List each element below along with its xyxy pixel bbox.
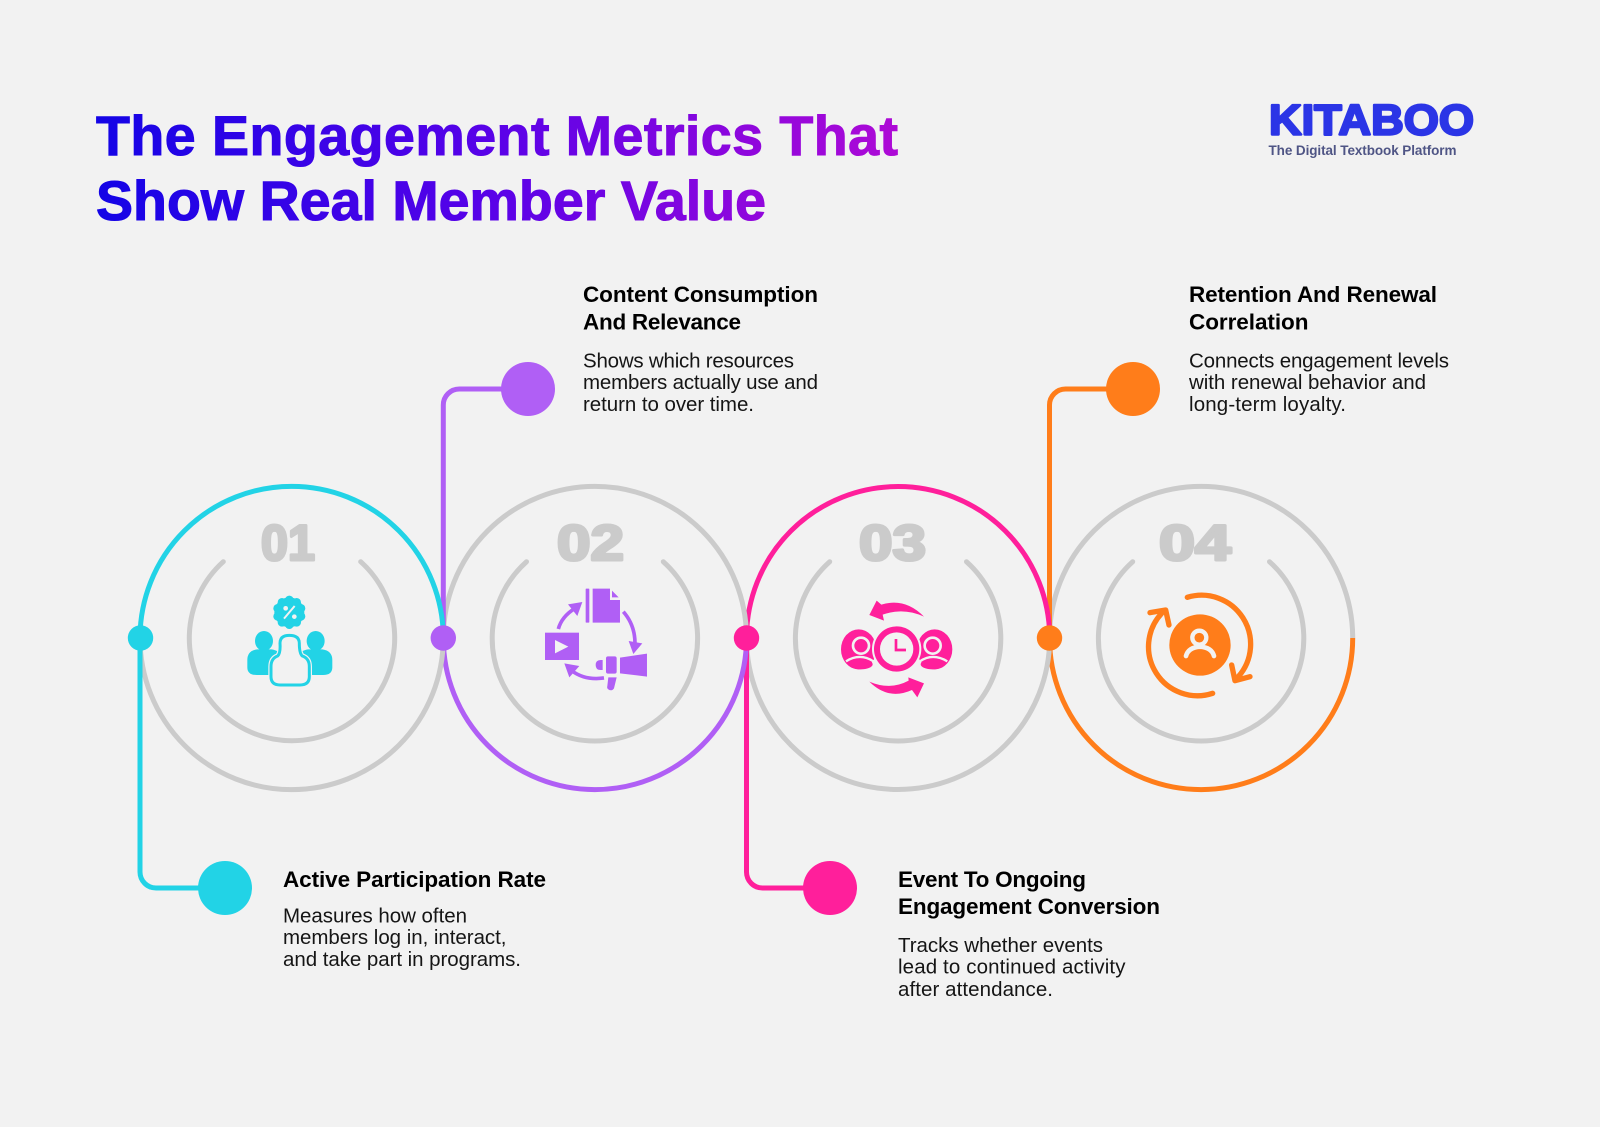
connector: step 01 bbox=[140, 638, 225, 888]
number 03: 03 bbox=[859, 515, 926, 571]
panel: step 04 retention and renewal bbox=[1050, 282, 1449, 790]
connector: step 02 bbox=[443, 389, 528, 638]
text: participation description bbox=[283, 904, 521, 971]
logo: Kitaboo: KITABOO bbox=[1269, 96, 1474, 144]
heading: retention and renewal: Retention And Renewal bbox=[1189, 282, 1437, 307]
icon: members and discount badge bbox=[247, 596, 332, 685]
ring: step 04 bbox=[1050, 486, 1353, 790]
panel: step 02 content consumption bbox=[443, 282, 818, 790]
icon: content formats cycle bbox=[545, 589, 647, 690]
dot: step 04 bbox=[1106, 362, 1160, 416]
ring: step 03 bbox=[746, 487, 1050, 789]
text: event description: after attendance. bbox=[898, 978, 1053, 1001]
text: participation description: members log in, interact, bbox=[283, 926, 506, 949]
text: retention description: Connects engagement levels bbox=[1189, 350, 1449, 372]
icon: event clock and people bbox=[841, 601, 952, 697]
title: The Engagement Metrics That bbox=[96, 105, 898, 167]
connector: step 04 bbox=[1050, 389, 1133, 638]
panel: step 03 event to ongoing engagement bbox=[746, 487, 1160, 1001]
text: retention description: with renewal behavior and bbox=[1188, 371, 1426, 394]
heading: content consumption: And Relevance bbox=[583, 310, 741, 334]
ring: step 01 bbox=[140, 486, 443, 790]
heading: retention and renewal: Correlation bbox=[1189, 310, 1308, 334]
dot: step 01 bbox=[198, 861, 252, 915]
text: event description: lead to continued activity bbox=[898, 956, 1126, 978]
heading: content consumption bbox=[583, 282, 818, 334]
heading: retention and renewal bbox=[1189, 282, 1437, 334]
heading: content consumption: Content Consumption bbox=[583, 282, 818, 307]
icon: member renewal cycle bbox=[1149, 595, 1251, 696]
heading: event to ongoing engagement: Event To Ongoing bbox=[898, 867, 1086, 892]
text: retention description bbox=[1188, 350, 1449, 416]
text: event description bbox=[898, 934, 1126, 1001]
heading: event to ongoing engagement bbox=[898, 867, 1160, 919]
number 01: 01 bbox=[261, 515, 315, 571]
heading: event to ongoing engagement: Engagement Conversion bbox=[898, 894, 1160, 919]
title bbox=[96, 105, 898, 232]
text: participation description: and take part in programs. bbox=[283, 948, 521, 971]
text: content description bbox=[583, 350, 818, 416]
dot: step 03 bbox=[803, 861, 857, 915]
number 04: 04 bbox=[1159, 515, 1231, 571]
dot: step 02 bbox=[501, 362, 555, 416]
text: retention description: long-term loyalty. bbox=[1189, 393, 1346, 416]
number 02: 02 bbox=[557, 515, 624, 571]
text: participation description: Measures how often bbox=[283, 904, 467, 928]
connector: step 03 bbox=[746, 638, 830, 888]
title: Show Real Member Value bbox=[96, 170, 766, 232]
heading: active participation rate: Active Participation Rate bbox=[283, 867, 546, 892]
ring: step 02 bbox=[443, 486, 746, 790]
logo: Kitaboo: The Digital Textbook Platform bbox=[1268, 143, 1456, 158]
panel: step 01 active participation bbox=[140, 486, 546, 971]
text: content description: return to over time. bbox=[583, 393, 754, 416]
text: content description: members actually use and bbox=[583, 371, 818, 394]
text: event description: Tracks whether events bbox=[898, 934, 1103, 957]
text: content description: Shows which resources bbox=[583, 350, 794, 372]
nodes: ring junction dots bbox=[128, 625, 1062, 651]
